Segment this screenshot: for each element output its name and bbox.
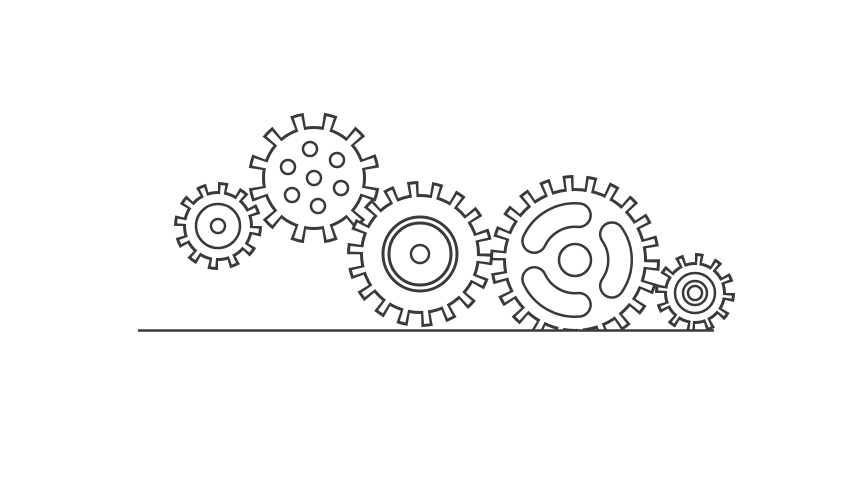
ground line	[138, 329, 714, 332]
gear: top with holes	[256, 120, 372, 236]
gear: small left	[180, 188, 256, 264]
gear: small right	[660, 258, 730, 328]
gear: middle	[354, 188, 486, 320]
gear: large with slots	[498, 182, 652, 338]
